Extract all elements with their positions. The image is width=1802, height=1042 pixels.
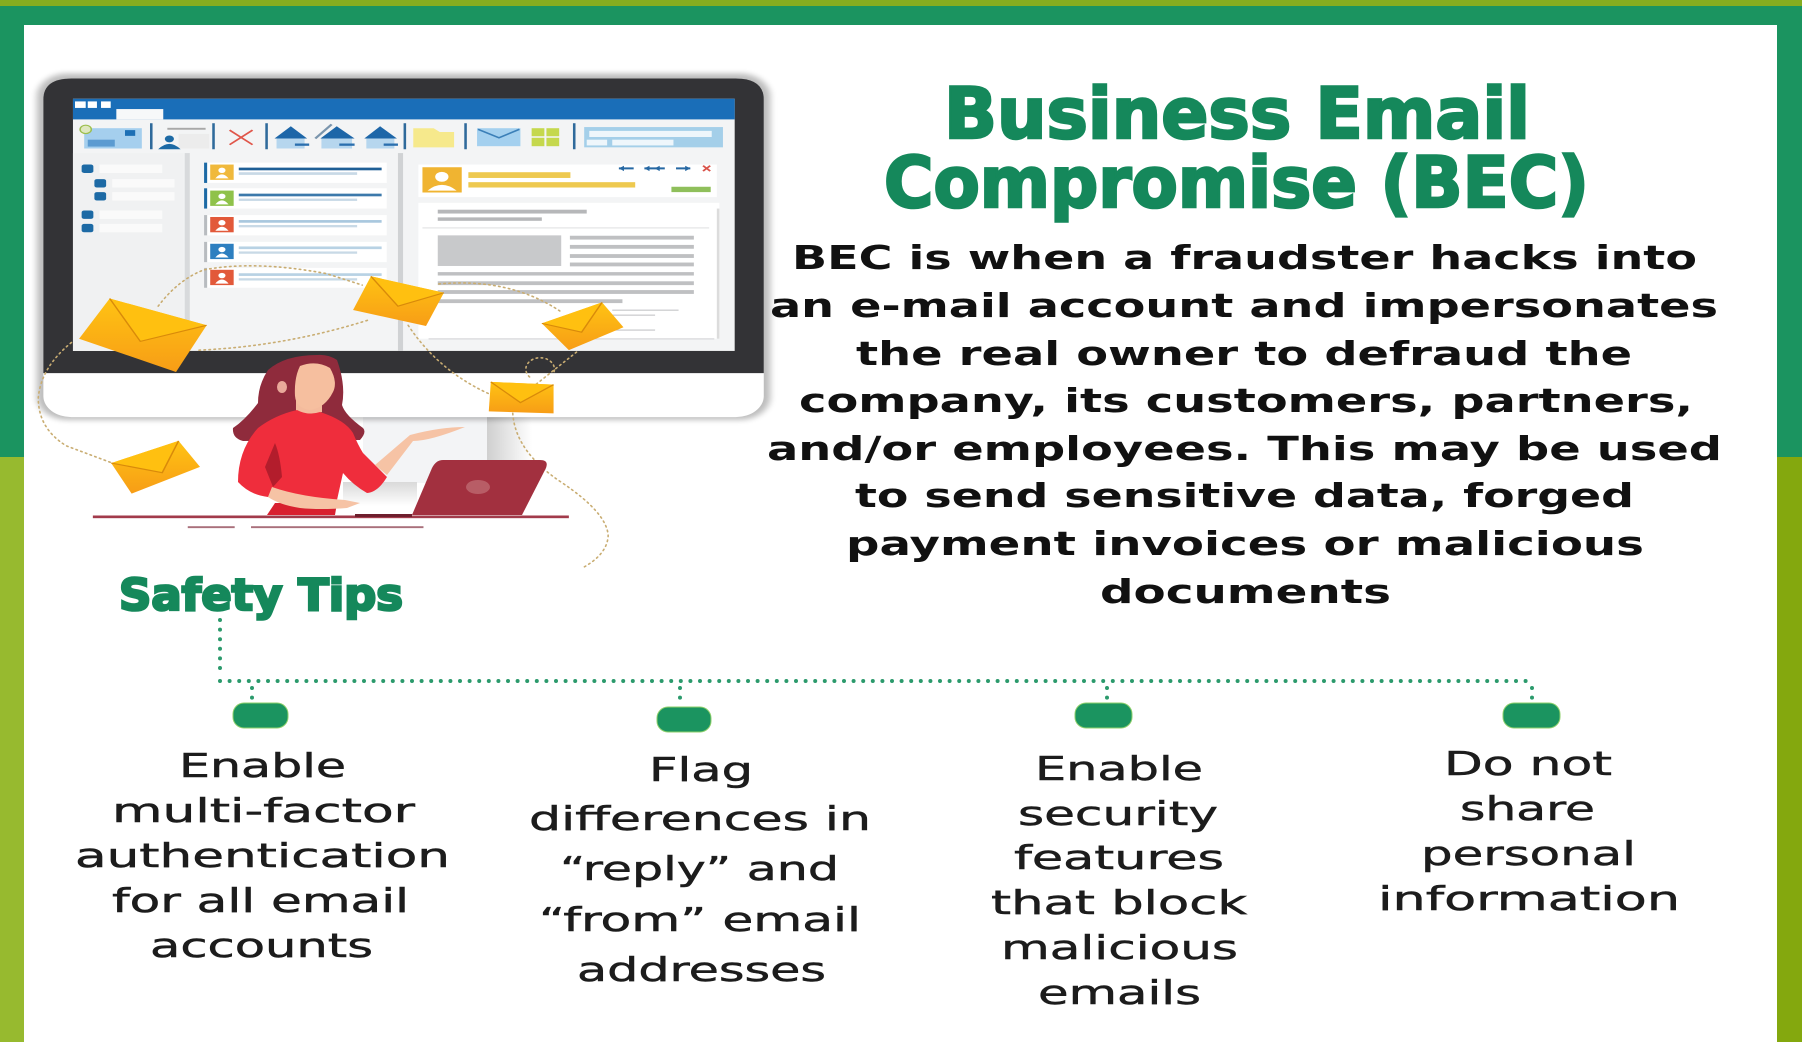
monitor screen: email client [73, 99, 735, 351]
tip 3 text: Enable [1035, 749, 1203, 788]
reply icon [274, 126, 309, 148]
illustration: monitor, woman and envelopes [37, 73, 770, 568]
table line [93, 515, 569, 528]
tip 4 [1378, 703, 1680, 918]
folder sidebar [73, 153, 190, 351]
monitor stand and shadows [343, 417, 532, 506]
tip 1 text: Enable [179, 746, 346, 785]
frame: left lower olive bar [0, 457, 24, 1042]
reading pane [398, 153, 719, 351]
dotted flight paths [38, 266, 608, 568]
tip 3 text: features [1014, 838, 1224, 877]
title: Compromise (BEC) [884, 142, 1589, 224]
frame: olive top strip [0, 0, 1802, 6]
description text block: and/or employees. This may be used [767, 429, 1722, 468]
description text block: the real owner to defraud the [856, 334, 1632, 373]
tip 2 text: “reply” and [560, 849, 839, 888]
tip 1 [75, 703, 450, 965]
description text block: an e-mail account and impersonates [770, 286, 1718, 325]
description text block: company, its customers, partners, [799, 381, 1693, 420]
description text block: payment invoices or malicious [846, 524, 1644, 563]
tip 4 text: Do not [1444, 744, 1612, 783]
tip 1 text [75, 746, 450, 965]
tip 1 text: multi-factor [112, 791, 416, 830]
marker [657, 707, 711, 732]
frame: left upper green bar [0, 25, 24, 457]
tip 4 text: information [1378, 879, 1680, 918]
tip 4 text: personal [1421, 834, 1636, 873]
lower arm [268, 487, 360, 509]
tip 3 [991, 703, 1248, 1012]
tip 4 text [1378, 744, 1680, 918]
icon: envelope lower centre [489, 382, 554, 413]
tip 3 text: emails [1038, 973, 1201, 1012]
tip 3 text: security [1018, 794, 1218, 833]
tip 2 text: differences in [529, 799, 871, 838]
frame: right upper green bar [1777, 25, 1802, 457]
tip 2 text: “from” email [539, 900, 861, 939]
laptop [355, 460, 547, 517]
tip 1 text: accounts [150, 926, 373, 965]
description text block: documents [1100, 572, 1391, 611]
icon: large envelope [79, 299, 207, 372]
description text block: to send sensitive data, forged [855, 476, 1634, 515]
neck and face [296, 395, 322, 414]
forward icon [364, 126, 398, 148]
reply all icon [315, 124, 355, 148]
lower body [267, 503, 337, 515]
connector: dotted tree [220, 620, 1533, 698]
monitor body [43, 78, 764, 417]
ear [277, 381, 287, 393]
icon: envelope centre [353, 276, 444, 326]
tip 1 text: authentication [75, 836, 450, 875]
tip 2 text: Flag [649, 750, 753, 789]
tip 2 text [529, 750, 871, 989]
marker [1075, 703, 1132, 728]
title: Business Email [944, 73, 1530, 155]
frame: right lower olive bar [1777, 457, 1802, 1042]
description text block: BEC is when a fraudster hacks into [792, 238, 1697, 277]
toolbar icons [80, 123, 723, 149]
hair [233, 355, 364, 441]
tip 3 text: malicious [1001, 928, 1238, 967]
description text block [767, 238, 1722, 611]
tip 2 text: addresses [577, 950, 826, 989]
monitor shadow [37, 73, 770, 420]
sweater fold [265, 443, 282, 487]
raised hand [375, 427, 465, 475]
marker [1503, 703, 1560, 728]
tip 3 text: that block [991, 883, 1248, 922]
tip 2 [529, 707, 871, 989]
sweater [238, 410, 387, 500]
woman [233, 355, 465, 515]
title [884, 73, 1589, 224]
marker [233, 703, 288, 728]
title bar [73, 99, 735, 119]
icon: envelope lower left [111, 441, 200, 494]
frame: green top band [0, 6, 1802, 25]
tip 3 text [991, 749, 1248, 1012]
heading: Safety Tips: Safety Tips [119, 570, 403, 621]
message list [204, 163, 387, 288]
tip 4 text: share [1460, 789, 1595, 828]
tip 1 text: for all email [112, 881, 409, 920]
icon: envelope right [542, 302, 623, 350]
